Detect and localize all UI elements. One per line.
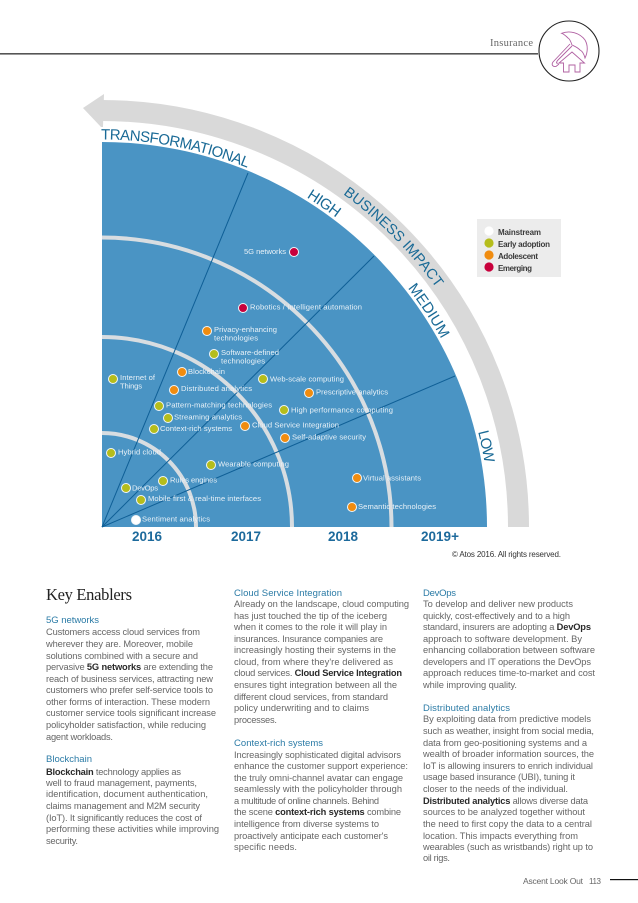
point: Internet of Things: Things <box>120 382 142 390</box>
point: Prescriptive analytics: Prescriptive analytics <box>316 388 388 396</box>
section: Blockchain: well to fraud management, payments, <box>45 778 197 788</box>
point: Privacy-enhancing technologies: technologies <box>214 334 258 342</box>
section: 5G networks: Customers access cloud services from <box>46 627 200 637</box>
section: Blockchain: (IoT). It significantly reduces the cost of <box>46 813 202 823</box>
point: Virtual assistants: Virtual assistants <box>363 474 421 482</box>
section: Distributed analytics <box>422 703 594 863</box>
section: Cloud Service Integration: increasingly hosting their systems in the <box>234 645 396 655</box>
section: Distributed analytics: wealth of broader information sources, the <box>422 749 594 759</box>
section: 5G networks <box>45 615 216 742</box>
section: Cloud Service Integration: Already on the landscape, cloud computing <box>234 599 409 609</box>
section: Distributed analytics: location. This impacts everything from <box>423 831 578 841</box>
section: Distributed analytics: wearables (such as wristbands) right up to <box>422 842 593 852</box>
section label: Insurance: Insurance <box>490 38 533 49</box>
section: Cloud Service Integration: cloud services. Cloud Service Integration <box>234 668 402 678</box>
point: Hybrid cloud: Hybrid cloud <box>118 448 161 456</box>
section: Blockchain: Blockchain technology applies as <box>46 767 181 777</box>
technology data points <box>106 247 436 524</box>
section: Context-rich systems: a multitude of online channels. Behind <box>234 796 379 806</box>
impact level label: high: HIGH <box>308 189 342 217</box>
column 3 <box>422 588 595 863</box>
point: Robotics: Robotics / Intelligent automation <box>250 302 362 312</box>
point: Rules engines: Rules engines <box>170 476 217 484</box>
section: Cloud Service Integration: insurances. Insurance companies are <box>234 634 383 644</box>
section: Cloud Service Integration: has just touched the tip of the iceberg <box>234 611 387 621</box>
blue quadrant <box>102 142 487 527</box>
section: 5G networks: agent workloads. <box>46 732 113 742</box>
section: Cloud Service Integration: different cloud services, from standard <box>234 692 388 702</box>
section: Context-rich systems: enhance the customer support experience: <box>234 761 408 771</box>
section: Distributed analytics: usage based insurance (UBI), tuning it <box>423 772 575 782</box>
column 2 <box>233 588 409 852</box>
point: Privacy-enhancing technologies <box>202 325 277 342</box>
section: Distributed analytics: IoT is allowing insurers to enrich individual <box>423 761 593 771</box>
point: Privacy-enhancing technologies: Privacy-enhancing <box>214 325 277 334</box>
heading: Key Enablers: Key Enablers <box>46 585 132 604</box>
section: Distributed analytics: data from geo-positioning systems and a <box>423 738 588 748</box>
section: Cloud Service Integration: processes. <box>234 715 277 725</box>
section: Cloud Service Integration: Cloud Service Integration <box>234 588 342 599</box>
point: Pattern-matching technologies: Pattern-matching technologies <box>166 400 272 410</box>
point: Software-defined technologies <box>210 348 279 366</box>
impact level label: medium: MEDIUM <box>408 282 450 338</box>
point: Software-defined technologies: technologies <box>221 356 265 366</box>
year axis labels: 2016 <box>132 529 163 544</box>
year axis labels: 2017 <box>231 529 261 544</box>
section: Context-rich systems: proactively anticipate each customer's <box>234 831 388 841</box>
point: 5G networks: 5G networks <box>244 247 286 256</box>
section: Context-rich systems: the scene context-rich systems combine <box>234 807 401 817</box>
section: Context-rich systems: intelligence from diverse systems to <box>234 819 379 829</box>
section: Cloud Service Integration: cloud, from where they're delivered as <box>234 657 393 667</box>
section: Context-rich systems: Increasingly sophisticated digital advisors <box>234 750 401 760</box>
section: DevOps: quickly, cost-effectively and to a high <box>423 611 570 621</box>
section: DevOps: developers and IT operations the DevOps <box>423 657 591 667</box>
axis title: business impact: BUSINESS IMPACT <box>344 186 444 285</box>
copyright note: © Atos 2016. All rights reserved. <box>452 550 561 559</box>
point: Semantic technologies: Semantic technologies <box>358 502 436 511</box>
point: Mobile first: Mobile first & real-time interfaces <box>148 494 261 503</box>
page footer: Ascent Look Out <box>523 876 584 886</box>
page footer: 113 <box>589 877 602 886</box>
section: Distributed analytics: By exploiting data from predictive models <box>423 714 591 724</box>
impact level label: transformational: TRANSFORMATIONAL <box>101 129 248 168</box>
header: section rule and icon <box>0 21 599 81</box>
section: DevOps: enhancing collaboration between software <box>423 645 595 655</box>
point: Blockchain: Blockchain <box>188 367 225 376</box>
year axis labels: 2019+ <box>421 529 459 544</box>
page footer <box>523 876 638 886</box>
section: 5G networks: solutions combined with a secure and <box>46 651 198 661</box>
column 1: key enablers <box>45 585 219 846</box>
point: Context-rich systems: Context-rich systems <box>160 424 232 433</box>
section: Distributed analytics: oil rigs. <box>423 853 450 863</box>
section: Distributed analytics: Distributed analytics allows diverse data <box>423 796 589 806</box>
section: Cloud Service Integration <box>233 588 409 725</box>
point: Sentiment analytics: Sentiment analytics <box>142 514 210 524</box>
point: Software-defined technologies: Software-defined <box>221 348 279 357</box>
section: 5G networks: other forms of interaction. These modern <box>46 697 210 707</box>
year axis labels: 2018 <box>328 529 359 544</box>
point: Internet of Things <box>108 373 156 390</box>
section: Blockchain: identification, document authentication, <box>46 789 208 799</box>
point: DevOps: DevOps <box>132 484 158 492</box>
section: 5G networks: policyholder satisfaction, while reducing <box>46 720 206 730</box>
point: Distributed analytics: Distributed analytics <box>181 384 252 393</box>
year axis labels <box>132 529 459 544</box>
section: Cloud Service Integration: policy underwriting and to claims <box>234 703 369 713</box>
section: DevOps <box>422 588 595 690</box>
legend: Adolescent <box>498 252 538 261</box>
point: Self-adaptive security: Self-adaptive security <box>292 432 366 442</box>
section: 5G networks: customers who prefer self-service tools to <box>46 685 213 695</box>
legend: Emerging <box>498 264 532 273</box>
point: Internet of Things: Internet of <box>120 373 156 382</box>
legend: Mainstream <box>498 228 541 237</box>
section: Distributed analytics: such as weather, insight from social media, <box>423 726 594 736</box>
icon: umbrella over house <box>539 21 599 81</box>
point: Streaming analytics: Streaming analytics <box>174 412 242 422</box>
point: Cloud Service Integration: Cloud Service Integration <box>252 420 339 430</box>
section: DevOps: DevOps <box>423 588 456 599</box>
section: 5G networks: wherever they are. Moreover, mobile <box>45 639 193 649</box>
section: DevOps: To develop and deliver new products <box>423 599 573 609</box>
section: DevOps: standard, insurers are adopting a DevOps <box>423 622 591 632</box>
section: 5G networks: reach of business services, attracting new <box>46 674 213 684</box>
legend: Early adoption <box>498 240 550 249</box>
legend <box>477 219 561 277</box>
section: Distributed analytics: closer to the needs of the individual. <box>423 784 568 794</box>
section: Blockchain: security. <box>46 836 78 846</box>
section: 5G networks: 5G networks <box>46 615 99 626</box>
section: Context-rich systems <box>234 738 408 852</box>
impact level label: low: LOW <box>478 430 495 462</box>
section: Context-rich systems: the truly omni-channel avatar can engage <box>234 773 403 783</box>
point: Wearable computing: Wearable computing <box>218 460 289 468</box>
section: Distributed analytics: the need to first copy the data to a central <box>423 819 592 829</box>
section: DevOps: while improving quality. <box>422 680 517 690</box>
section: 5G networks: pervasive 5G networks are extending the <box>46 662 213 672</box>
arrow: business impact axis <box>83 94 518 527</box>
section: Blockchain: claims management and M2M security <box>46 801 200 811</box>
section: DevOps: approach to software development. By <box>423 634 582 644</box>
section: DevOps: approach reduces time-to-market and cost <box>423 668 595 678</box>
section: Blockchain: performing these activities while improving <box>46 824 219 834</box>
point: Web-scale computing: Web-scale computing <box>270 374 344 384</box>
section: Blockchain <box>45 754 219 846</box>
section: 5G networks: customer service tools significant increase <box>46 708 216 718</box>
chart: business impact radar <box>83 94 529 544</box>
section: Context-rich systems: Context-rich systems <box>234 738 323 749</box>
section: Cloud Service Integration: ensures tight integration between all the <box>234 680 397 690</box>
section: Context-rich systems: specific needs. <box>234 842 297 852</box>
point: High performance computing: High performance computing <box>291 406 393 414</box>
section: Cloud Service Integration: when it comes to the role it will play in <box>233 622 387 632</box>
section: Blockchain: Blockchain <box>46 754 92 765</box>
section: Distributed analytics: Distributed analytics <box>423 703 510 714</box>
section: Context-rich systems: seamlessly with the policyholder through <box>234 784 402 794</box>
section: Distributed analytics: sources to be analyzed together without <box>423 807 585 817</box>
